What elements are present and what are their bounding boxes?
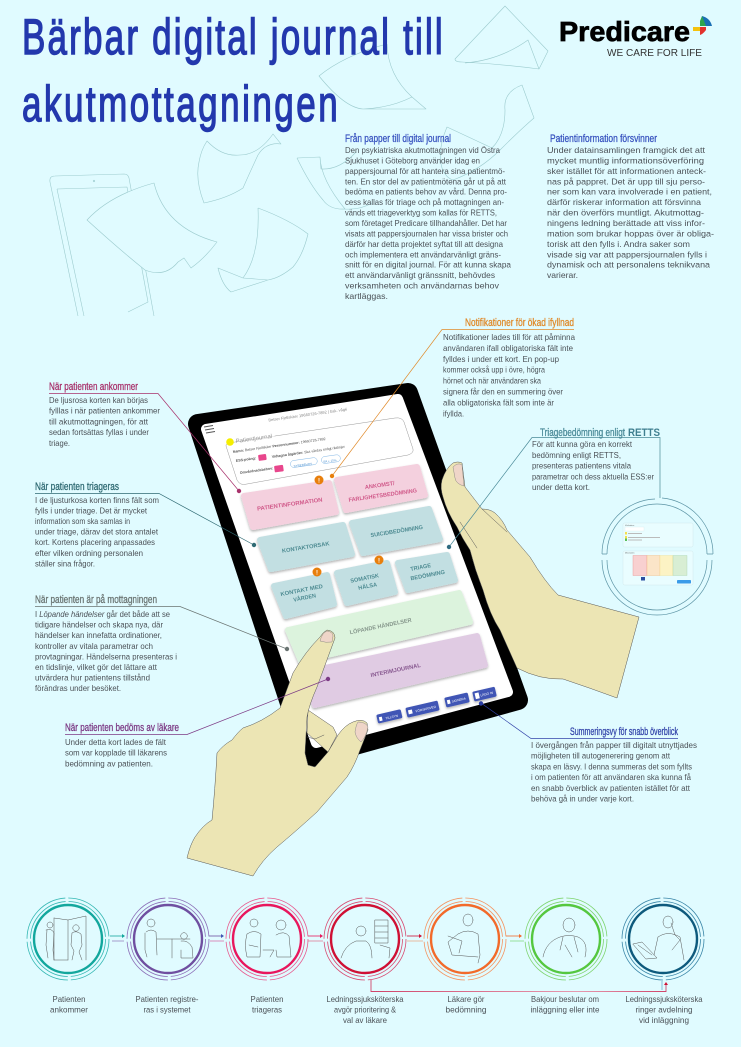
- title: Bärbar digital journal till: [22, 10, 443, 66]
- text block: patientinformation försvinner: visade sig var att pappersjournalen fylls i: [547, 249, 707, 259]
- step 4: ledningssjuksköterska: [324, 898, 406, 1025]
- annotation: triagebedömning enligt RETTS: presenteras patientens vitala: [532, 461, 631, 471]
- text block: patientinformation försvinner: dynamisk och att personalens teknikvana: [547, 260, 710, 270]
- hamburger menu icon: [204, 426, 215, 433]
- patient journal box: ESS-poäng:: [236, 456, 256, 463]
- patient journal box: [226, 418, 413, 484]
- card: somatisk hälsa: SOMATISK: [350, 573, 380, 585]
- step 7: ledningssjuksköterska ringer avdelning: [622, 898, 704, 1025]
- annotation: när patienten är på mottagningen: [35, 594, 289, 693]
- text block: från papper till digital journal: pappersjournal för att hantera sina patientmö-: [345, 166, 505, 176]
- arrow from step 4 to step 7: [371, 980, 668, 992]
- annotation: summeringsvy för snabb överblick: behöva gå in under varje kort.: [531, 794, 634, 804]
- annotation: när patienten ankommer: triage.: [49, 438, 70, 448]
- text block: patientinformation försvinner: varierar.: [547, 270, 578, 280]
- annotation: när patienten är på mottagningen: en tidslinje, vilket gör det lättare att: [35, 662, 158, 672]
- card: kontakt med vården: KONTAKT MED: [280, 584, 323, 598]
- annotation: när patienten är på mottagningen: kontroller av vitala parametrar och: [35, 641, 153, 651]
- text block: från papper till digital journal: vänds ett triageverktyg som kallas för RETTS,: [345, 208, 497, 218]
- card: ankomst / farlighetsbedömning: FARLIGHETSBEDÖMNING: [348, 487, 418, 504]
- annotation: triagebedömning enligt RETTS: [447, 427, 660, 549]
- annotation: när patienten triageras: under triage, därav det stora antalet: [35, 527, 159, 537]
- annotation: när patienten triageras: ställer sina frågor.: [35, 558, 95, 568]
- annotation: när patienten bedöms av läkare: När patienten bedöms av läkare: [65, 722, 179, 734]
- arrow 1 to 2: [110, 934, 125, 941]
- card: somatisk hälsa: HÄLSA: [358, 581, 378, 592]
- annotation: när patienten ankommer: [49, 381, 241, 493]
- notification badges: !: [378, 558, 380, 564]
- annotation: triagebedömning enligt RETTS: parametrar och dess aktuella ESS:er: [532, 471, 654, 481]
- annotation: summeringsvy för snabb överblick: möjligheten till autogenerering genom att: [531, 751, 671, 761]
- logo: Predicare: [559, 16, 712, 59]
- card: kontakt med vården: VÅRDEN: [293, 592, 317, 604]
- step 6: bakjour beslutar: inläggning eller inte: [530, 1004, 600, 1014]
- card: ankomst / farlighetsbedömning: ANKOMST/: [365, 481, 396, 491]
- step 2: patienten registreras i systemet: [127, 898, 209, 1014]
- text block: patientinformation försvinner: mation som brukar hoppas över är obliga-: [547, 228, 714, 238]
- annotation: summeringsvy för snabb överblick: [479, 701, 698, 804]
- patient journal box: Vidtagna åtgärder: Ska vårdas enligt riktlinjer: [272, 445, 346, 459]
- buttons: LÄGG IN: [480, 690, 494, 697]
- text block: från papper till digital journal: Den psykiatriska akutmottagningen vid Östra: [345, 145, 500, 155]
- text block: patientinformation försvinner: nas på pappret. Det är upp till sju perso-: [547, 176, 705, 186]
- text block: från papper till digital journal: verksamheten och användarnas behov: [345, 281, 500, 291]
- text block: från papper till digital journal: snitt för en digital journal. För att kunna skapa: [345, 260, 511, 270]
- card: patientinformation: PATIENTINFORMATION: [257, 497, 323, 513]
- card: patientinformation: [244, 483, 336, 527]
- text block: patientinformation försvinner: Patientinformation försvinner: [550, 133, 657, 145]
- text block: från papper till digital journal: därför har detta projektet syftat till att designa: [345, 239, 503, 249]
- step 3: patienten triageras: [226, 898, 308, 1014]
- annotation: när patienten ankommer: När patienten ankommer: [49, 381, 138, 393]
- step 2: patienten registreras i systemet: ras i systemet: [144, 1004, 191, 1014]
- annotation: när patienten bedöms av läkare: som var kopplade till läkarens: [65, 748, 168, 758]
- notification badges: !: [316, 570, 318, 576]
- card: interimjournal: [301, 636, 485, 705]
- annotation: när patienten ankommer: sedan fortsättas fyllas i under: [49, 427, 149, 437]
- text block: patientinformation försvinner: [547, 133, 714, 280]
- annotation: notifikationer för ökad ifyllnad: fylldes i under ett kort. En pop-up: [443, 354, 559, 364]
- step 1: patienten ankommer: [27, 898, 109, 1014]
- annotation: när patienten är på mottagningen: När patienten är på mottagningen: [35, 594, 157, 606]
- text block: patientinformation försvinner: torisk att den fylls i. Andra saker som: [547, 239, 690, 249]
- text block: från papper till digital journal: ett användarvänligt gränssnitt, behövdes: [345, 270, 496, 280]
- annotation: när patienten ankommer: till akutmottagningen, för att: [49, 416, 149, 426]
- logo: Predicare: WE CARE FOR LIFE: [607, 48, 702, 59]
- annotation: notifikationer för ökad ifyllnad: Notifikationer för ökad ifyllnad: [465, 317, 574, 329]
- annotation: när patienten bedöms av läkare: Under detta kort lades de fält: [65, 737, 167, 747]
- card: somatisk hälsa: [337, 563, 395, 603]
- arrow 3 to 4: [308, 934, 323, 941]
- triage chart card: Mätvärden: [625, 552, 634, 554]
- annotation: summeringsvy för snabb överblick: i om patienten för att användaren ska kunna få: [531, 772, 691, 782]
- text block: från papper till digital journal: Från papper till digital journal: [345, 133, 451, 145]
- text block: patientinformation försvinner: ningens ledning berättade att viss infor-: [547, 218, 705, 228]
- buttons: SIGNERA: [451, 696, 467, 704]
- step 3: patienten triageras: Patienten: [250, 994, 284, 1004]
- buttons: TILLSYN: [385, 713, 399, 720]
- patient journal box: Namn: Betser Fjellskäer Personnummer: 19660726-7892: [233, 437, 326, 454]
- annotation: notifikationer för ökad ifyllnad: hörnet och när användaren ska: [443, 376, 541, 386]
- floating papers illustration: [198, 6, 548, 292]
- text block: från papper till digital journal: [345, 133, 511, 301]
- annotation: notifikationer för ökad ifyllnad: kommer också upp i övre, högra: [443, 365, 545, 375]
- vital parameters card: Vitalstatus: [625, 524, 634, 527]
- patient journal box: SYREBEHOV: [293, 462, 312, 468]
- title: akutmottagningen: [22, 77, 338, 133]
- text block: patientinformation försvinner: ner som kan vara involverade i en patient,: [547, 187, 712, 197]
- annotation: när patienten bedöms av läkare: bedömning av patienten.: [65, 758, 153, 768]
- annotation: när patienten ankommer: De ljusrosa korten kan börjas: [49, 395, 149, 405]
- tablet body: [198, 393, 518, 758]
- annotation: när patienten triageras: När patienten triageras: [35, 481, 119, 493]
- card: interimjournal: INTERIMJOURNAL: [370, 663, 422, 679]
- notification badges: [312, 476, 384, 576]
- annotation: triagebedömning enligt RETTS: För att kunna göra en korrekt: [532, 439, 633, 449]
- card: ankomst / farlighetsbedömning: [337, 467, 425, 510]
- patient journal box: Patientjournal: [235, 434, 273, 445]
- step 5: läkare gör bedömning: [424, 898, 506, 1014]
- annotation: när patienten är på mottagningen: I Löpande händelser går det både att se: [35, 609, 170, 619]
- text block: patientinformation försvinner: när den överförs muntligt. Akutmottag-: [547, 208, 704, 218]
- step 1: patienten ankommer: Patienten: [52, 994, 86, 1004]
- annotation: notifikationer för ökad ifyllnad: [330, 317, 575, 478]
- annotation: triagebedömning enligt RETTS: RETTS: [628, 427, 660, 439]
- arrow 2 to 3: [209, 934, 224, 941]
- text block: från papper till digital journal: ten. En stor del av patientmötena går ut på att: [345, 176, 507, 186]
- step 7: ledningssjuksköterska ringer avdelning: ringer avdelning: [636, 1004, 693, 1014]
- step 7: ledningssjuksköterska ringer avdelning: vid inläggning: [639, 1015, 689, 1025]
- RETTS detail circle: [602, 498, 713, 615]
- text block: patientinformation försvinner: mycket muntlig informationsöverföring: [547, 155, 704, 165]
- step 5: läkare gör bedömning: bedömning: [446, 1004, 487, 1014]
- text block: från papper till digital journal: bedöma en patients behov av vård. Denna pro-: [345, 187, 507, 197]
- buttons: FÖRSKRIVER: [415, 705, 437, 713]
- annotation: när patienten är på mottagningen: förändras under besöket.: [35, 683, 121, 693]
- title: [22, 10, 443, 133]
- text block: från papper till digital journal: visats att pappersjournalen har vissa brister och: [345, 228, 508, 238]
- step 4: ledningssjuksköterska: Ledningssjuksköterska: [326, 994, 404, 1004]
- annotation: när patienten ankommer: fylllas i när patienten ankommer: [49, 406, 160, 416]
- annotation: triagebedömning enligt RETTS: under detta kort.: [532, 482, 590, 492]
- annotation: när patienten triageras: I de ljusturkosa korten finns fält som: [35, 495, 159, 505]
- card: löpande händelser: [288, 593, 470, 661]
- card: suicidbedömning: [352, 509, 440, 553]
- step 6: bakjour beslutar: [525, 898, 607, 1014]
- annotation: när patienten är på mottagningen: händelser kan innefatta ordinationer,: [35, 630, 162, 640]
- annotation: summeringsvy för snabb överblick: skapa en läsvy. I denna summeras det som fyllts: [531, 761, 693, 771]
- right hand holding the tablet: [441, 462, 639, 698]
- annotation: när patienten triageras: fylls i under triage. Det är mycket: [35, 506, 148, 516]
- annotation: när patienten är på mottagningen: provtagningar. Händelserna presenteras i: [35, 651, 177, 661]
- left hand pointing at the screen: [187, 630, 368, 876]
- card: triagebedömning: [398, 555, 455, 590]
- card: kontaktorsak: KONTAKTORSAK: [282, 541, 331, 555]
- annotation: notifikationer för ökad ifyllnad: signera får den en summering över: [443, 386, 563, 396]
- card: löpande händelser: LÖPANDE HÄNDELSER: [349, 617, 412, 636]
- annotation: när patienten är på mottagningen: tidigare händelser och skapa nya, där: [35, 620, 163, 630]
- annotation: när patienten är på mottagningen: utvärdera hur patientens tillstånd: [35, 673, 150, 683]
- text block: patientinformation försvinner: därför riskerar information att försvinna: [547, 197, 701, 207]
- arrow 5 to 6: [506, 934, 524, 941]
- tablet screen: [206, 399, 508, 743]
- arrow 4 to 5: [407, 934, 423, 941]
- text block: patientinformation försvinner: Under datainsamlingen framgick det att: [547, 145, 706, 155]
- step 2: patienten registreras i systemet: Patienten registre-: [136, 994, 199, 1004]
- annotation: notifikationer för ökad ifyllnad: ifyllda.: [443, 408, 464, 418]
- step 4: ledningssjuksköterska: val av läkare: [343, 1015, 387, 1025]
- card: triagebedömning: BEDÖMNING: [410, 569, 446, 582]
- patient journal box: Omvårdnadsbehov:: [240, 466, 274, 475]
- annotation: summeringsvy för snabb överblick: I övergången från papper till digitalt utnyttjades: [531, 740, 698, 750]
- step 1: patienten ankommer: ankommer: [50, 1004, 88, 1014]
- card: kontaktorsak: [260, 525, 352, 569]
- annotation: när patienten triageras: efter vilken ordning personalen: [35, 548, 143, 558]
- buttons: [376, 687, 497, 724]
- text block: patientinformation försvinner: sker istället för att informationen anteck-: [547, 166, 706, 176]
- annotation: summeringsvy för snabb överblick: Summeringsvy för snabb överblick: [570, 726, 678, 738]
- step 6: bakjour beslutar: Bakjour beslutar om: [531, 994, 599, 1004]
- patient journal box: SÄ + 15%: [323, 458, 337, 464]
- tablet outline illustration with paper: [50, 174, 217, 316]
- annotation: när patienten bedöms av läkare: [65, 677, 330, 768]
- annotation: notifikationer för ökad ifyllnad: alla obligatoriska fält som inte är: [443, 397, 554, 407]
- process flow: [27, 898, 704, 1025]
- text block: från papper till digital journal: och implementera ett användarvänligt gräns-: [345, 249, 501, 259]
- text block: från papper till digital journal: kartläggas.: [345, 291, 388, 301]
- card: triagebedömning: TRIAGE: [410, 563, 432, 573]
- notification badges: !: [318, 478, 320, 484]
- annotation: notifikationer för ökad ifyllnad: Notifikationer lades till för att påminna: [443, 332, 575, 342]
- annotation: när patienten triageras: [35, 481, 256, 568]
- card: kontakt med vården: [274, 575, 334, 616]
- logo: Predicare: Predicare: [559, 16, 690, 47]
- step 3: patienten triageras: triageras: [252, 1004, 283, 1014]
- tablet: [198, 393, 518, 758]
- card: suicidbedömning: SUICIDBEDÖMNING: [370, 524, 424, 539]
- annotation: notifikationer för ökad ifyllnad: användaren ifall obligatoriska fält inte: [443, 343, 573, 353]
- annotation: triagebedömning enligt RETTS: Triagebedömning enligt: [540, 427, 625, 439]
- text block: från papper till digital journal: som företaget Predicare tillhandahåller. Det har: [345, 218, 507, 228]
- annotation: när patienten triageras: kort. Kortens placering anpassades: [35, 537, 156, 547]
- step 7: ledningssjuksköterska ringer avdelning: Ledningssjuksköterska: [626, 994, 703, 1004]
- annotation: när patienten triageras: information som ska samlas in: [35, 516, 130, 526]
- annotation: summeringsvy för snabb överblick: en snabb överblick av patienten istället för att: [531, 783, 691, 793]
- step 4: ledningssjuksköterska: avgör prioritering &: [334, 1004, 396, 1014]
- header text: Betser Fjellskäer 19660726-7892 | bak. vågé: [268, 406, 348, 423]
- step 5: läkare gör bedömning: Läkare gör: [448, 994, 485, 1004]
- annotation: triagebedömning enligt RETTS: bedömning enligt RETTS,: [532, 450, 621, 460]
- text block: från papper till digital journal: Sjukhuset i Göteborg använder idag en: [345, 155, 480, 165]
- text block: från papper till digital journal: cess kallas för triage och på mottagningen an-: [345, 197, 504, 207]
